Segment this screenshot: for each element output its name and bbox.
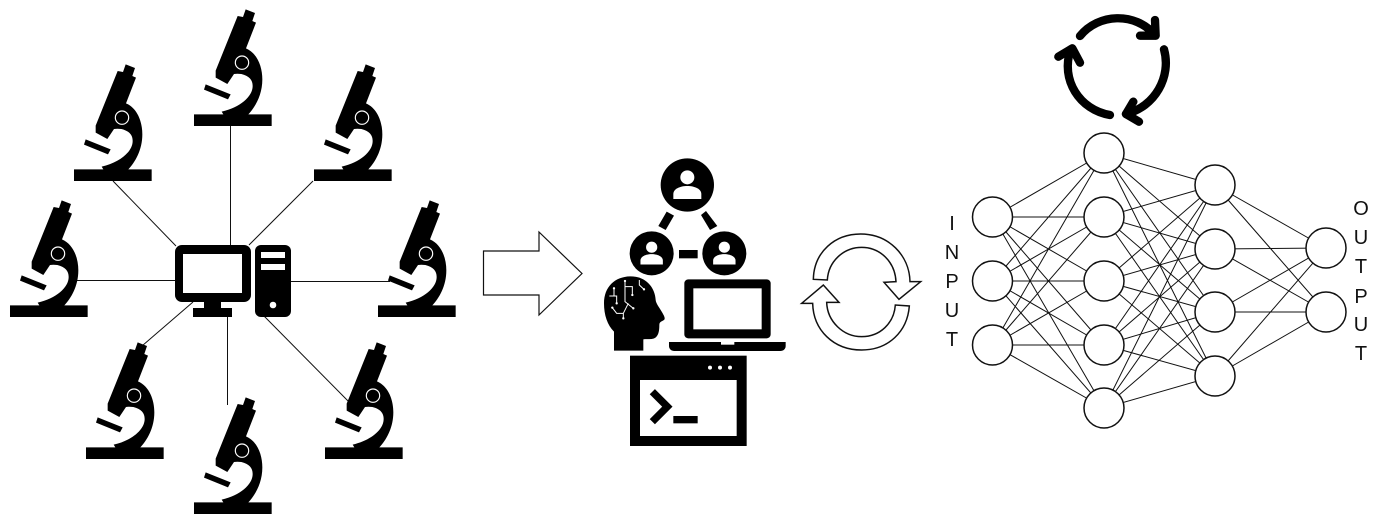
icon: team network (630, 158, 746, 275)
label: input (945, 213, 959, 351)
label: input: N (945, 242, 959, 264)
microscope: bottom (194, 397, 272, 514)
label: input: P (945, 271, 959, 293)
microscope: left (10, 200, 88, 317)
label: output: T (1355, 256, 1367, 278)
arrow: hollow right arrow (484, 232, 582, 315)
microscope: lower right (325, 342, 403, 459)
icon: desktop computer (175, 245, 291, 317)
label: input: I (949, 213, 955, 235)
label: input: T (946, 329, 958, 351)
label: input: U (945, 300, 959, 322)
icon: laptop (669, 279, 786, 351)
microscope: upper right (314, 64, 392, 181)
label: output (1353, 198, 1369, 365)
network connection lines (76, 126, 390, 405)
neural network connections (993, 153, 1326, 408)
icon: AI head (604, 276, 665, 351)
microscope: upper left (74, 64, 152, 181)
neural network nodes (972, 133, 1346, 428)
microscope: top (194, 9, 272, 126)
label: output: U (1354, 227, 1368, 249)
icon cluster: team, AI head, laptop and terminal (604, 158, 786, 446)
label: output: T (1355, 343, 1367, 365)
icon: hollow cycle arrows (802, 234, 921, 350)
label: output: O (1353, 198, 1369, 220)
label: output: U (1354, 314, 1368, 336)
icon: bold cycle arrows (1058, 18, 1166, 122)
label: output: P (1354, 286, 1368, 308)
microscope: right (378, 200, 456, 317)
microscope: lower left (86, 342, 164, 459)
icon: command terminal (630, 356, 747, 446)
